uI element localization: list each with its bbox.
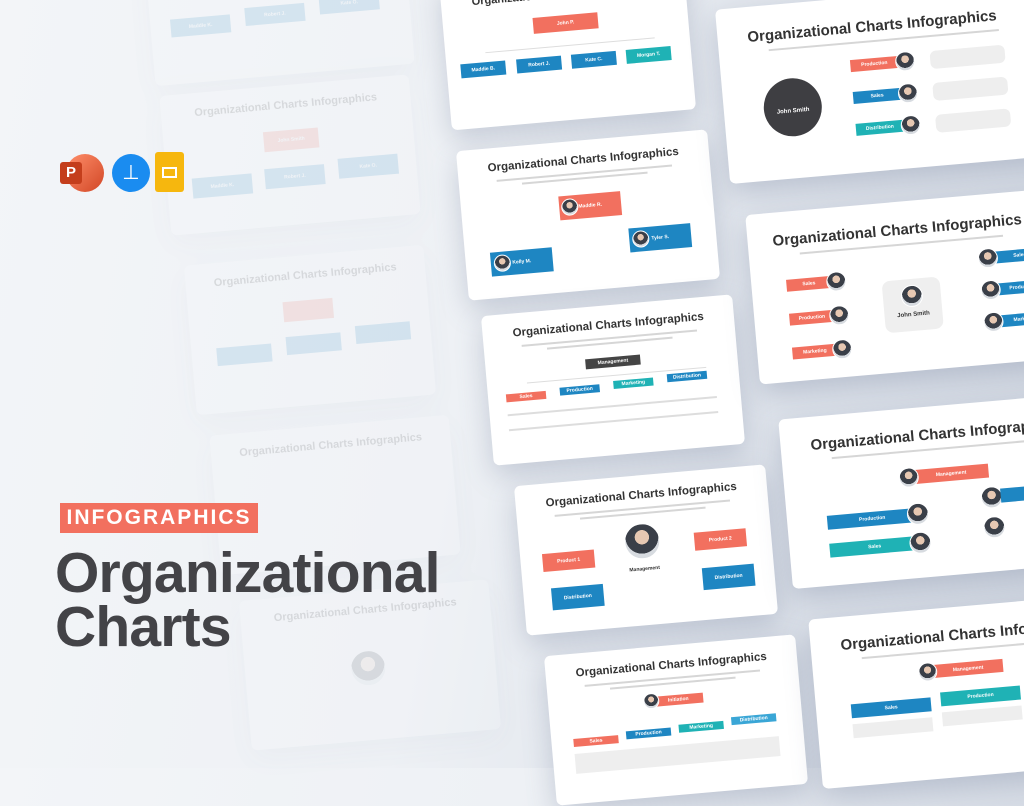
slide: bottom center: Organizational Charts Infographics: [575, 651, 767, 680]
app icons: [60, 152, 184, 192]
title: [55, 541, 440, 659]
text: Kate O.: [359, 162, 377, 170]
icon: powerpoint: P: [66, 164, 76, 181]
slide: right top - John Smith circle: Distribution: [866, 124, 894, 132]
text: Organizational Charts Infographics: [213, 261, 397, 289]
slide: top center (partial): [439, 0, 696, 130]
text: Maddie K.: [189, 22, 213, 30]
slide: bottom center: [544, 634, 808, 806]
slide: top center (partial): John P.: [557, 19, 575, 27]
slide: products chart: Product 2: [709, 535, 732, 543]
icon: google slides: [155, 152, 184, 192]
text: Organizational Charts Infographics: [194, 91, 377, 119]
slide: two-level chart: [456, 129, 720, 301]
slide: products chart: Product 1: [557, 557, 580, 565]
slide: two-level chart: Kelly M.: [512, 258, 532, 266]
text: Organizational Charts Infographics: [273, 596, 457, 624]
slide: products chart: Organizational Charts Infographics: [545, 481, 737, 510]
title: Charts: [55, 595, 231, 659]
slide: right 4: Production: [967, 692, 994, 700]
slide: products chart: [514, 464, 778, 636]
slide: management list: Sales: [519, 393, 533, 400]
slide: right 2 - John Smith center: Marketing: [803, 348, 827, 356]
slide: bottom center: Sales: [589, 737, 603, 745]
slide: right 4: Sales: [884, 704, 898, 711]
slide: bottom center: Initiation: [668, 696, 689, 704]
slide: management list: Production: [566, 386, 593, 394]
slide: right top - John Smith circle: Sales: [870, 92, 884, 99]
slide: right 2 - John Smith center: [745, 186, 1024, 384]
slide: management list: Management: [597, 358, 628, 366]
slide: bottom center: Distribution: [739, 715, 768, 723]
slide: top center (partial): Maddie B.: [471, 65, 495, 73]
icon: keynote: ⊥: [122, 162, 140, 184]
slide: top center (partial): Kate C.: [585, 56, 603, 63]
slide: two-level chart: Organizational Charts Infographics: [487, 146, 679, 175]
text: Maddie K.: [210, 182, 234, 190]
text: John Smith: [277, 136, 305, 144]
slide: products chart: Distribution: [564, 593, 592, 601]
slide: management list: Distribution: [673, 372, 701, 381]
slide: right 4: [808, 591, 1024, 789]
slide: right 2 - John Smith center: Sales: [802, 280, 816, 287]
slide: right 4: Management: [953, 664, 984, 673]
slide: right 3 - management rows: Sales: [868, 543, 881, 550]
slide: top center (partial): Robert J.: [528, 61, 550, 68]
slide: products chart: Management: [629, 565, 660, 574]
slide: right 2 - John Smith center: Production: [799, 314, 825, 322]
slide: top center (partial): Morgan T.: [637, 51, 661, 59]
faded background slides: [170, 0, 457, 680]
slide: bottom center: Production: [635, 729, 662, 738]
text: Robert J.: [284, 173, 306, 181]
slide: two-level chart: Tyler S.: [651, 234, 669, 242]
slide: right top - John Smith circle: Production: [861, 60, 888, 68]
icon: powerpoint: [60, 154, 104, 192]
slide: bottom center: Marketing: [689, 723, 713, 731]
text: Organizational Charts Infographics: [239, 431, 422, 459]
slide: right 2 - John Smith center: John Smith: [897, 310, 930, 319]
slide: right top - John Smith circle: [715, 0, 1024, 184]
slide: management list: Marketing: [621, 379, 645, 387]
badge: INFOGRAPHICS: INFOGRAPHICS: [66, 506, 252, 529]
icon: keynote: [112, 154, 150, 192]
slide: right top - John Smith circle: John Smith: [777, 107, 810, 116]
slide: right 3 - management rows: Production: [859, 515, 886, 523]
slide: products chart: Distribution: [714, 573, 743, 581]
slide: management list: [481, 294, 745, 466]
slide: right 3 - management rows: Management: [936, 470, 967, 478]
slide: right 3 - management rows: [778, 391, 1024, 589]
slide: right 2 - John Smith center: Organizational Charts Infographics: [772, 211, 1022, 250]
slide: two-level chart: Maddie R.: [578, 202, 602, 210]
text: Robert J.: [264, 11, 286, 18]
slide: right top - John Smith circle: Organizational Charts Infographics: [747, 7, 997, 46]
title: Organizational: [55, 541, 440, 605]
slide: management list: Organizational Charts Infographics: [512, 311, 704, 340]
